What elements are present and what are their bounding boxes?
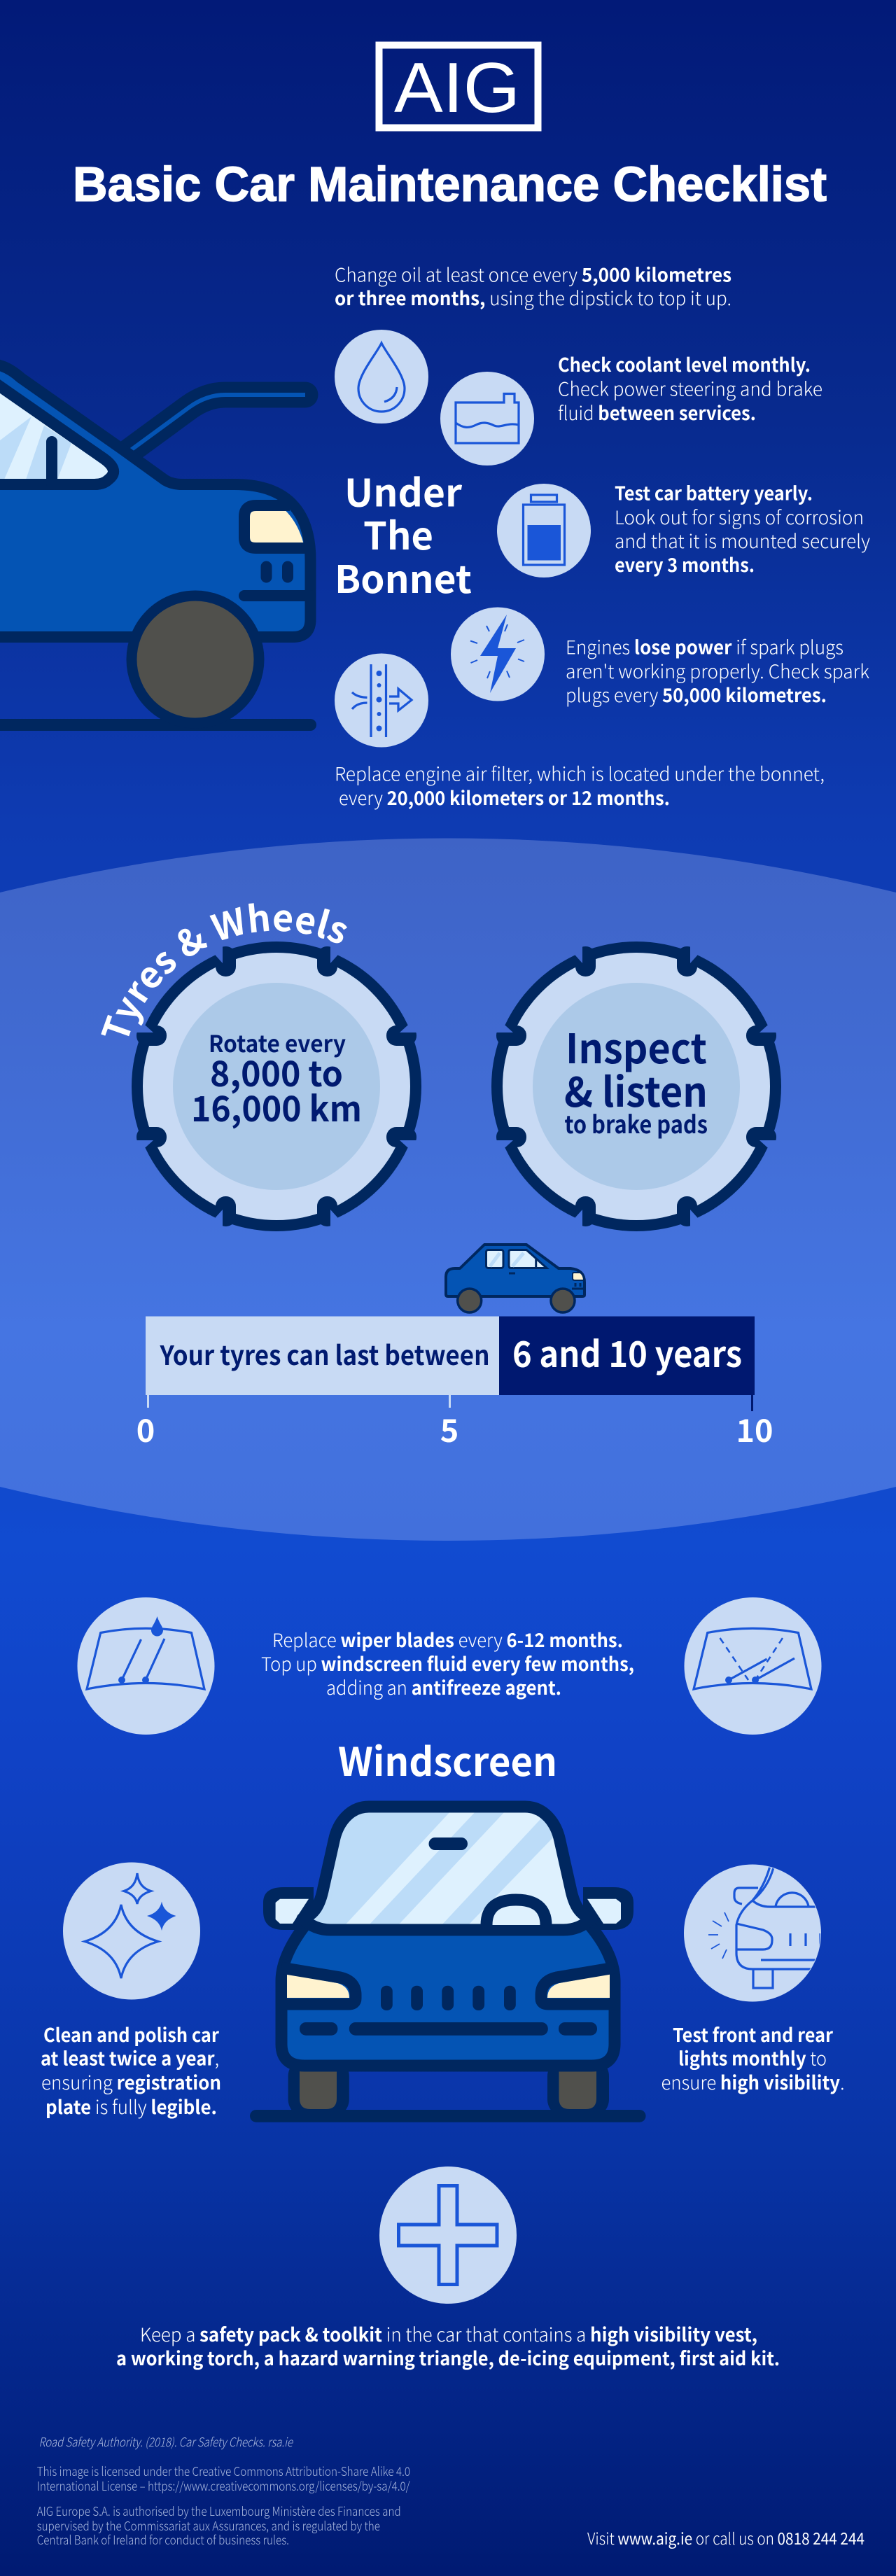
chart: tyre life bar: 6 and 10 years — [512, 1326, 742, 1378]
text: lights: ensure high visibility. — [661, 2068, 844, 2095]
icon: first aid cross — [379, 2166, 517, 2304]
icon: oil drop — [335, 330, 428, 424]
footer: source and licence: Road Safety Authority. (2018). Car Safety Checks. rsa.ie — [39, 2433, 293, 2451]
icon: battery — [497, 484, 591, 578]
heading: under the bonnet — [335, 462, 472, 604]
text: change oil: Change oil at least once every 5,000 kilometres — [335, 260, 732, 287]
chart: tyre life bar — [136, 1316, 774, 1451]
panel: tyres and wheels — [101, 903, 781, 1451]
wheel: rotate: Rotate every — [209, 1026, 346, 1059]
panel: under the bonnet: and that it is mounted securely — [615, 526, 870, 554]
text: battery: Test car battery yearly. — [615, 479, 813, 505]
chart: tyre life bar: 0 — [136, 1406, 155, 1451]
wheel: rotate: 16,000 km — [191, 1082, 362, 1132]
panel: under the bonnet: Look out for signs of corrosion — [615, 503, 864, 530]
logo: AIG: AIG — [394, 49, 520, 127]
illustration: side view of car with open bonnet — [0, 364, 316, 731]
text: coolant: Check coolant level monthly. — [558, 350, 811, 377]
text: safety pack: Keep a safety pack & toolkit in the car that contains a high visibility vest, — [140, 2320, 757, 2347]
heading: under the bonnet: The — [363, 505, 433, 561]
icon: windscreen fluid — [77, 1597, 214, 1735]
icon: small car — [446, 1245, 584, 1312]
panel: under the bonnet: every 20,000 kilometers or 12 months. — [339, 783, 670, 811]
wheel: inspect and listen: to brake pads — [564, 1105, 708, 1141]
wheel: inspect and listen — [491, 941, 781, 1231]
chart: tyre life bar: Your tyres can last between — [160, 1334, 490, 1373]
text: clean and polish: ensuring registration — [41, 2068, 221, 2095]
panel: under the bonnet — [0, 260, 870, 811]
text: lights: Test front and rear — [673, 2020, 833, 2047]
wheel: rotate — [132, 941, 421, 1231]
text: clean and polish: at least twice a year, — [41, 2044, 219, 2071]
panel: tyres and wheels background band — [0, 839, 896, 1541]
panel: under the bonnet: or three months, using the dipstick to top it up. — [335, 284, 732, 311]
panel: under the bonnet: aren't working properly. Check spark — [566, 657, 869, 684]
panel: windscreen — [41, 1597, 844, 2122]
icon: air filter — [335, 654, 428, 748]
text: air filter: Replace engine air filter, which is located under the bonnet, — [335, 759, 825, 787]
heading: windscreen: Windscreen — [338, 1731, 557, 1788]
icon: spark — [451, 608, 545, 701]
icon: wipers — [685, 1597, 822, 1735]
text: lights: lights monthly to — [678, 2044, 827, 2071]
panel: windscreen: Top up windscreen fluid every few months, — [261, 1649, 634, 1676]
heading: under the bonnet: Under — [344, 462, 462, 518]
panel: safety pack — [116, 2166, 780, 2371]
footer: source and licence: This image is licensed under the Creative Commons Attribution-Share Alike 4.0 — [37, 2463, 410, 2480]
wheel: inspect and listen: & listen — [564, 1060, 708, 1119]
title: Basic Car Maintenance Checklist — [73, 157, 827, 211]
text: wiper blades: Replace wiper blades every 6-12 months. — [272, 1625, 623, 1653]
text: clean and polish — [41, 2020, 221, 2120]
panel: windscreen: adding an antifreeze agent. — [326, 1673, 561, 1700]
heading: under the bonnet: Bonnet — [335, 549, 472, 604]
wheel: inspect and listen: Inspect — [566, 1016, 707, 1075]
illustration: front view of car — [250, 1807, 645, 2122]
footer: source and licence: AIG Europe S.A. is authorised by the Luxembourg Ministère des Finances and — [37, 2502, 401, 2520]
wheel: rotate: 8,000 to — [210, 1046, 343, 1097]
panel: safety pack: a working torch, a hazard warning triangle, de-icing equipment, first aid kit. — [116, 2344, 780, 2371]
footer: source and licence: supervised by the Commissariat aux Assurances, and is regulated by the — [37, 2517, 380, 2535]
text: lights — [661, 2020, 844, 2095]
text: clean and polish: Clean and polish car — [43, 2020, 219, 2047]
icon: sparkles — [63, 1862, 200, 1999]
panel: under the bonnet: plugs every 50,000 kilometres. — [566, 680, 827, 708]
footer: contact: Visit www.aig.ie or call us on 0818 244 244 — [587, 2526, 864, 2549]
text: spark plugs: Engines lose power if spark plugs — [566, 633, 844, 659]
chart: tyre life bar: 5 — [440, 1406, 458, 1451]
chart: tyre life bar: 10 — [736, 1406, 774, 1451]
footer: source and licence: Central Bank of Ireland for conduct of business rules. — [37, 2531, 289, 2549]
icon: headlight — [684, 1865, 822, 2002]
panel: under the bonnet: Check power steering and brake — [558, 374, 822, 402]
footer: source and licence: International License – https://www.creativecommons.org/licenses/by-sa/4.0/ — [37, 2477, 410, 2495]
footer: source and licence — [37, 2433, 410, 2549]
icon: coolant tank — [440, 372, 534, 465]
heading: tyres and wheels on arc: Tyres & Wheels — [101, 903, 347, 1036]
panel: under the bonnet: fluid between services. — [558, 398, 756, 426]
panel: under the bonnet: every 3 months. — [615, 550, 755, 578]
text: clean and polish: plate is fully legible. — [46, 2092, 217, 2120]
